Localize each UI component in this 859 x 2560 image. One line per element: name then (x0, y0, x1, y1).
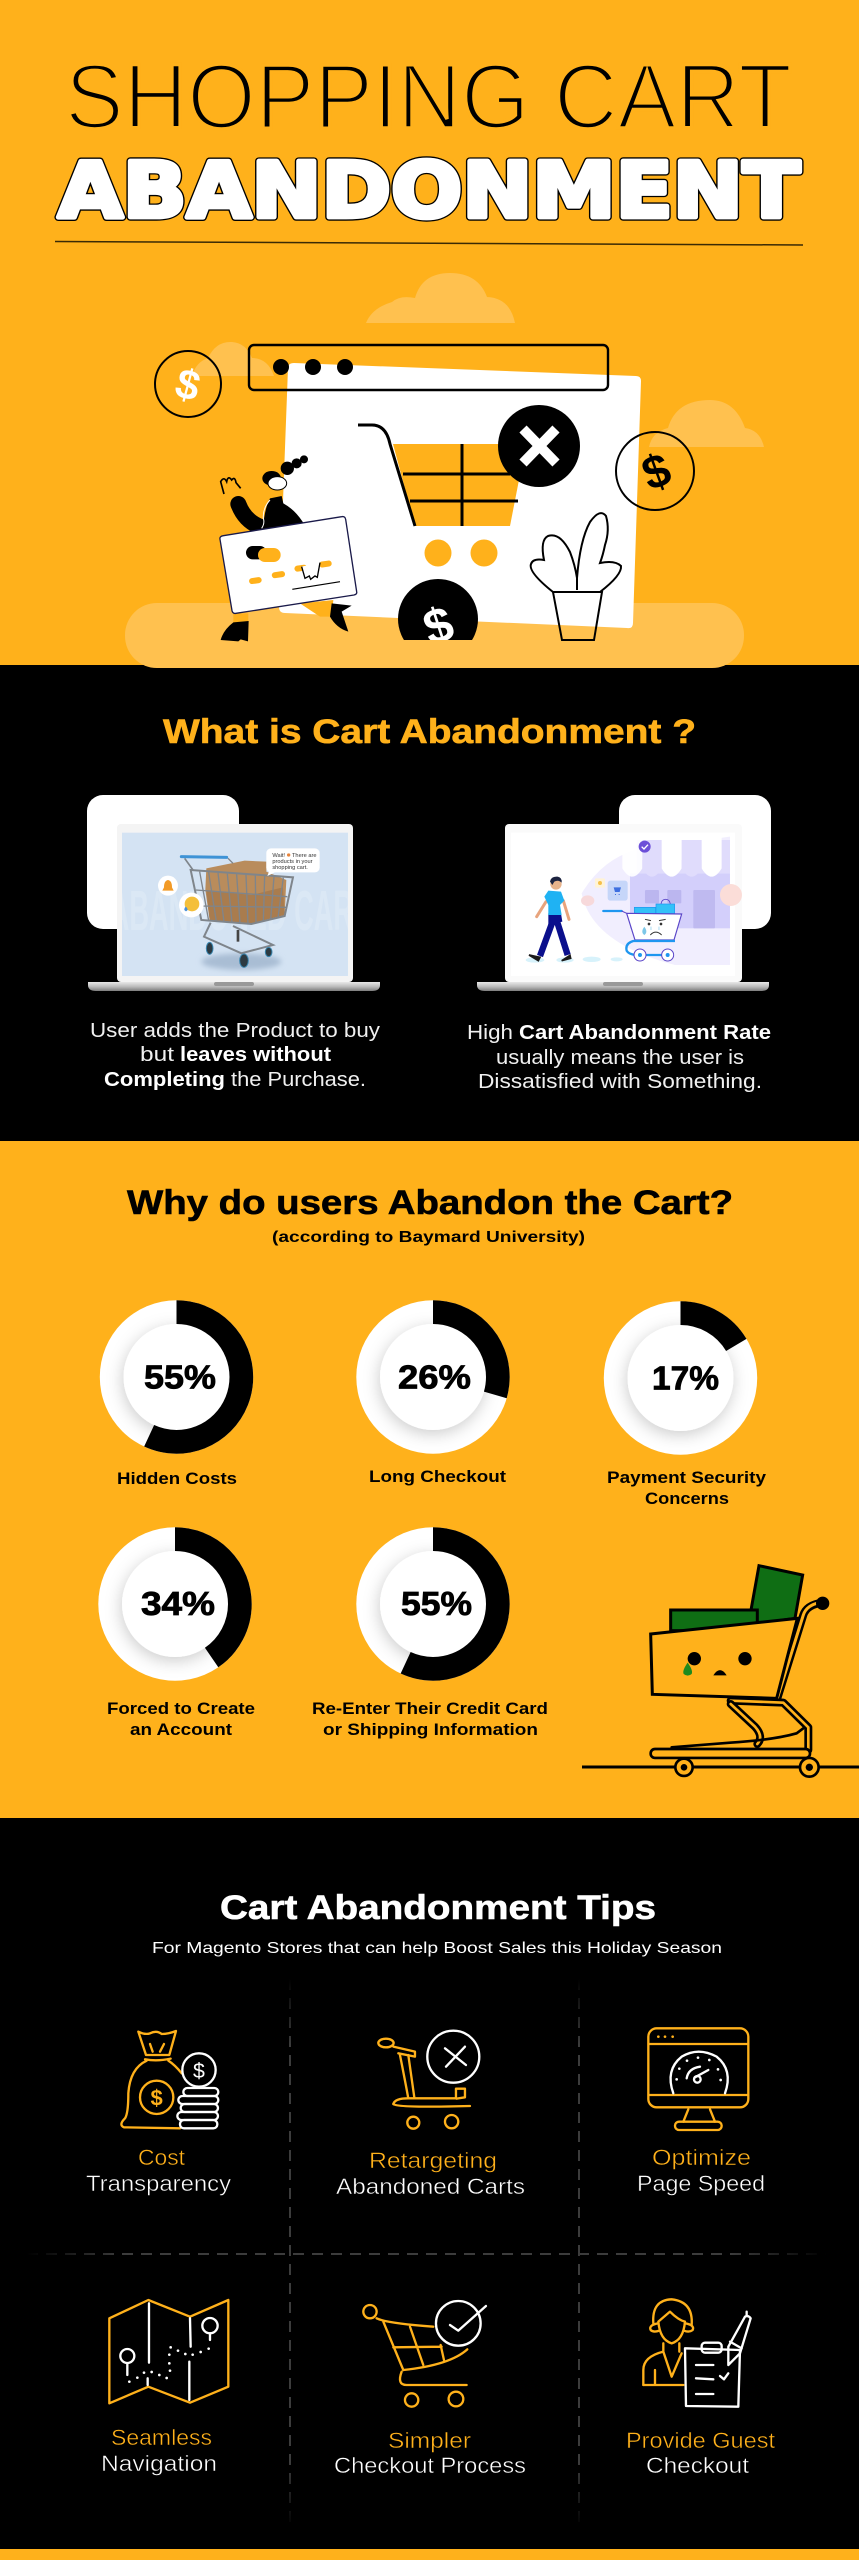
label: payment security concerns (607, 1468, 767, 1508)
subheading: baymard: (according to Baymard University) (272, 1229, 585, 1246)
panel: why users abandon background (0, 1141, 859, 1818)
icon: money bag: $ (193, 2059, 205, 2083)
label: retargeting abandoned carts: Retargeting (369, 2148, 497, 2173)
label: optimize page speed: Optimize (652, 2145, 751, 2170)
ground line (582, 1766, 859, 1768)
icon: money bag: $ (151, 2085, 163, 2110)
ground pill (125, 603, 744, 668)
donut: long checkout 26% (356, 1300, 510, 1454)
label: simpler checkout process (334, 2428, 526, 2478)
donut: forced account 34% (98, 1527, 252, 1681)
text: user adds the product: the Purchase. (231, 1069, 366, 1091)
tips grid dashes (27, 1979, 827, 2528)
footer strip (0, 2549, 859, 2560)
text: high cart abandonment rate (467, 1022, 771, 1093)
label: optimize page speed (637, 2145, 765, 2196)
label: forced to create an account: Forced to Create (107, 1699, 255, 1718)
cloud left (192, 342, 274, 376)
text: user adds the product (90, 1020, 380, 1091)
donut: forced account 34%: 34% (141, 1585, 215, 1622)
label: seamless navigation: Seamless (111, 2425, 212, 2450)
icon: guest with clipboard (643, 2299, 751, 2407)
donut: hidden costs 55% (100, 1300, 253, 1454)
panel: hero background (0, 0, 859, 665)
coin left (155, 351, 221, 417)
icon: speed monitor (648, 2028, 748, 2130)
coin right (616, 432, 694, 510)
label: provide guest checkout (626, 2428, 775, 2478)
label: payment security concerns: Concerns (645, 1489, 729, 1508)
label: forced to create an account (107, 1699, 255, 1739)
cart frame (358, 425, 518, 526)
back card (619, 795, 771, 929)
panel: what is cart abandonment background (0, 665, 859, 1141)
browser dots (273, 359, 353, 375)
text: user adds the product: User adds the Product to buy (90, 1020, 380, 1042)
cart wheels (424, 540, 498, 566)
heading: why do users abandon the cart: Why do users Abandon the Cart? (127, 1184, 733, 1222)
label: re-enter credit card (312, 1699, 548, 1739)
label: provide guest checkout: Checkout (646, 2453, 749, 2478)
label: re-enter credit card: or Shipping Information (323, 1720, 538, 1739)
label: hidden costs: Hidden Costs (117, 1469, 237, 1488)
plant (531, 513, 621, 640)
screen art: cart with boxes: products in your (272, 859, 313, 865)
label: provide guest checkout: Provide Guest (626, 2428, 775, 2453)
icon: map (109, 2300, 228, 2403)
text: ABANDONED CART (110, 880, 370, 943)
donut: hidden costs 55%: 55% (144, 1358, 216, 1396)
text: user adds the product: but (140, 1044, 175, 1066)
screen art: cart with boxes: shopping cart. (272, 865, 308, 871)
donut: payment security 17%: 17% (652, 1360, 719, 1396)
label: simpler checkout process: Simpler (388, 2428, 471, 2453)
laptop notch (603, 982, 643, 986)
bottom dollar coin (398, 579, 478, 640)
bottom dollar coin: $ (416, 595, 460, 657)
title line: shopping cart: SHOPPING CART (65, 46, 792, 148)
cloud right (649, 400, 764, 447)
text: high cart abandonment rate: High (467, 1022, 513, 1044)
icon: money bag (121, 2031, 218, 2128)
donut: re-enter info 55%: 55% (401, 1585, 472, 1622)
laptop frame (117, 824, 353, 982)
text: high cart abandonment rate: usually means the user is (496, 1047, 744, 1069)
label: forced to create an account: an Account (130, 1720, 232, 1739)
laptop base (477, 982, 769, 991)
label: retargeting abandoned carts: Abandoned Carts (336, 2174, 525, 2199)
cart basket (393, 444, 526, 526)
laptop: right (477, 795, 771, 991)
browser bar (249, 345, 608, 390)
text: high cart abandonment rate: Dissatisfied with Something. (478, 1071, 762, 1093)
white browser panel (279, 363, 641, 628)
title (58, 46, 801, 236)
screen art: cart with boxes: Wait! (272, 853, 285, 859)
panel: tips background (0, 1818, 859, 2549)
illustration: hero shopping scene (125, 273, 764, 668)
icon: cart with check (363, 2301, 486, 2407)
label: payment security concerns: Payment Security (607, 1468, 767, 1487)
cloud top (366, 273, 515, 323)
donut: payment security 17% (604, 1301, 757, 1455)
screen art: sad cart and man (511, 833, 742, 976)
coin left: $ (171, 359, 205, 410)
laptop: left (87, 795, 380, 991)
icon: cart with cross (378, 2031, 479, 2129)
cancel badge (498, 405, 580, 487)
label: seamless navigation: Navigation (101, 2451, 217, 2476)
label: cost transparency: Cost (138, 2145, 185, 2170)
label: re-enter credit card: Re-Enter Their Credit Card (312, 1699, 548, 1718)
coin right: $ (635, 442, 677, 500)
text: user adds the product: leaves without (180, 1044, 331, 1066)
illustration: sad shopping cart (651, 1566, 829, 1777)
heading: cart abandonment tips: Cart Abandonment Tips (220, 1889, 656, 1927)
subheading: magento stores: For Magento Stores that can help Boost Sales this Holiday Season (152, 1940, 722, 1957)
label: seamless navigation (101, 2425, 217, 2476)
back card (87, 795, 239, 929)
label: retargeting abandoned carts (336, 2148, 525, 2199)
text: user adds the product: Completing (104, 1069, 225, 1091)
donut: long checkout 26%: 26% (398, 1358, 471, 1396)
heading: what is cart abandonment: What is Cart Abandonment ? (163, 713, 696, 751)
laptop notch (214, 982, 254, 986)
label: simpler checkout process: Checkout Process (334, 2453, 526, 2478)
donut: re-enter info 55% (356, 1527, 510, 1681)
label: optimize page speed: Page Speed (637, 2171, 765, 2196)
text: high cart abandonment rate: Cart Abandonment Rate (519, 1022, 771, 1044)
label: cost transparency (86, 2145, 231, 2196)
label: long checkout: Long Checkout (369, 1467, 506, 1486)
label: cost transparency: Transparency (86, 2171, 231, 2196)
screen art: cart with boxes (122, 832, 348, 976)
title rule (55, 242, 803, 245)
laptop frame (505, 824, 742, 982)
shopper with credit card (220, 455, 357, 641)
laptop base (88, 982, 380, 991)
title line: abandonment outline: ABANDONMENT (58, 147, 801, 236)
screen art: cart with boxes: There are (292, 853, 317, 859)
title line: abandonment fill: ABANDONMENT (58, 147, 801, 236)
